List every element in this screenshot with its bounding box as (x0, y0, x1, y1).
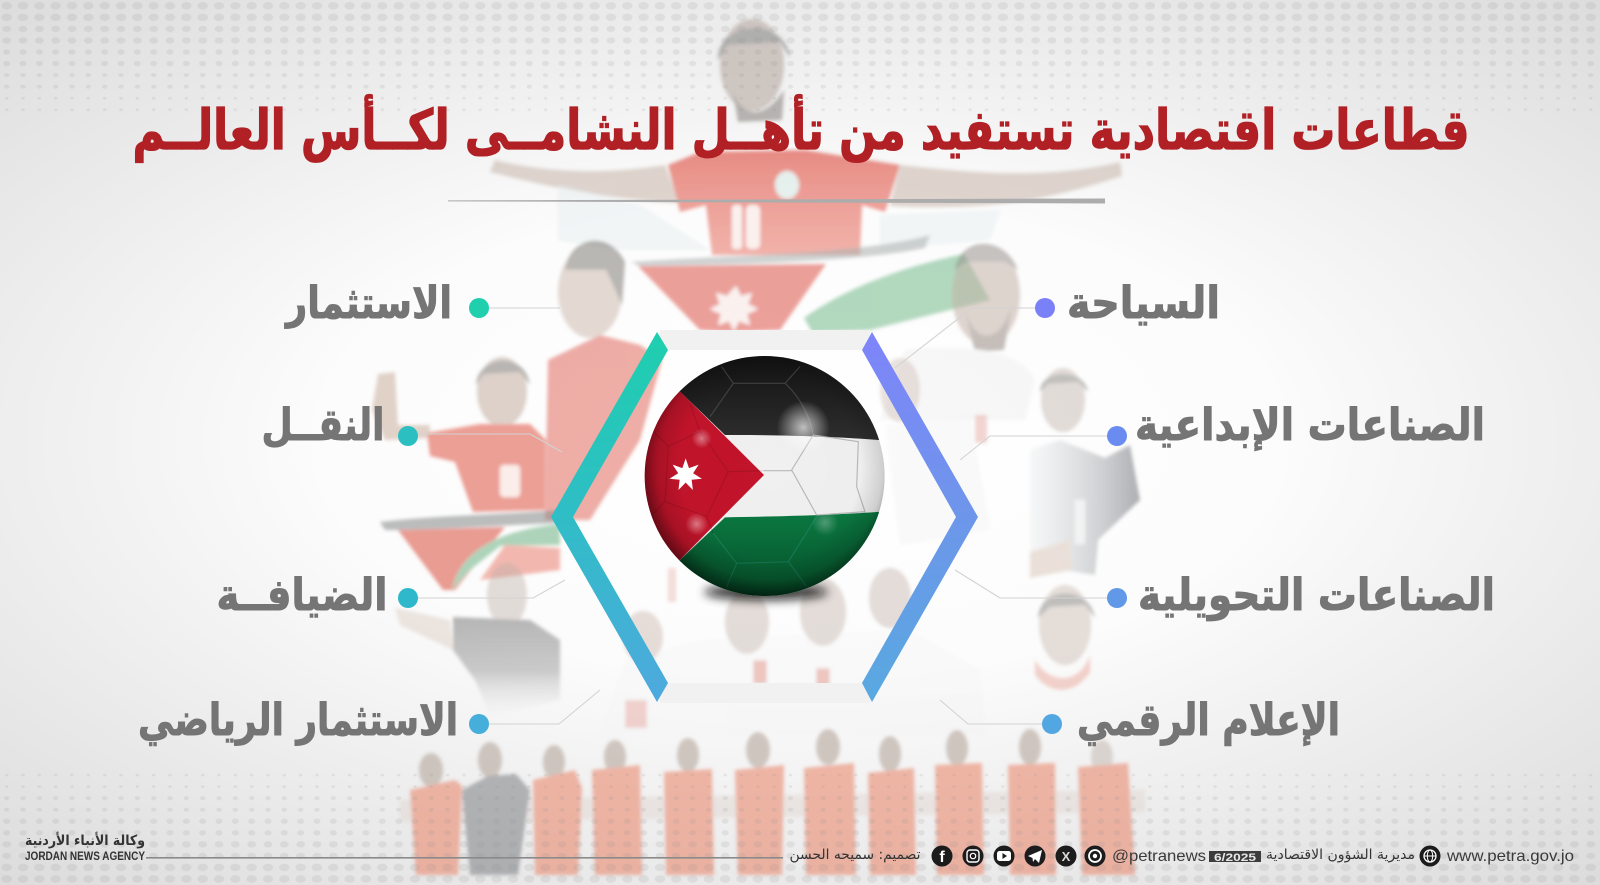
item: transport: النقــل (262, 400, 384, 451)
flag held on the left (380, 510, 560, 590)
goalkeeper (395, 563, 560, 715)
player 10 (1078, 740, 1135, 875)
flag black stripe (680, 356, 880, 440)
icon: x: X (1062, 849, 1071, 864)
dotted pattern top band (0, 0, 1600, 116)
date badge (1209, 851, 1261, 864)
dotted pattern bottom band (0, 769, 1600, 885)
social handle: @petranews (1112, 848, 1206, 865)
linked arms behind the line-up (400, 790, 1145, 822)
agency logo text: وكالة الأنباء الأردنية (25, 832, 145, 849)
flag held behind central player (631, 235, 990, 332)
item: digital media: الإعلام الرقمي (1077, 695, 1340, 746)
pale blue backdrop behind central player (558, 185, 1000, 250)
hexagon frame (551, 330, 978, 703)
player 6 (592, 740, 642, 875)
agency logo text: JORDAN NEWS AGENCY (25, 851, 145, 863)
icon: facebook (932, 846, 952, 866)
connector lines (418, 308, 1107, 724)
icon: globe (1420, 846, 1440, 866)
item: hospitality: الضيافــة (216, 570, 388, 621)
celebrating group at the bottom centre (600, 568, 985, 735)
designer credit: تصميم: سميحه الحسن (790, 847, 921, 863)
player 3 (664, 738, 714, 875)
title divider (448, 198, 1105, 204)
item: creative industries: الصناعات الإبداعية (1135, 400, 1485, 451)
player number 5 on the right (880, 358, 990, 545)
player 23 (410, 753, 462, 875)
icon: instagram (962, 846, 984, 866)
football with Jordan flag (644, 356, 885, 596)
player number 21 on the left (372, 357, 546, 512)
flag red triangle (644, 391, 764, 560)
flag white stripe (686, 410, 884, 596)
player head lower right (1035, 585, 1095, 690)
coach on the right (1030, 368, 1140, 578)
line-up of eleven players at the bottom (400, 729, 1145, 875)
icon: youtube (994, 846, 1014, 866)
date badge: 6/2025 (1214, 852, 1256, 864)
item: sports investment: الاستثمار الرياضي (138, 695, 458, 746)
player 11 (1008, 729, 1056, 875)
player 8 (735, 732, 784, 875)
social icons (932, 846, 1106, 866)
flag seven-pointed star (669, 458, 702, 490)
player on the right, shouting (880, 244, 1035, 420)
goalkeeper 1 (462, 742, 530, 875)
central player with spread arms (490, 19, 1122, 255)
item: manufacturing industries: الصناعات التحويلية (1138, 570, 1495, 621)
background photo collage of players (372, 19, 1145, 875)
player 17 (533, 745, 582, 875)
website: www.petra.gov.jo (1446, 848, 1574, 865)
department name: مديرية الشؤون الاقتصادية (1266, 847, 1415, 863)
item: investment: الاستثمار (284, 278, 452, 329)
player 13 (868, 736, 916, 875)
hexagon bottom bar (660, 683, 870, 703)
ball seams (650, 367, 865, 587)
icon: telegram (1024, 846, 1046, 866)
icon: whatsapp (1084, 846, 1106, 866)
agency logo text (25, 832, 145, 863)
footer rule (146, 857, 783, 859)
ball highlights (778, 402, 828, 450)
player 8b (935, 730, 984, 875)
icon: facebook: f (939, 849, 945, 866)
icon: x (1056, 846, 1076, 866)
player left of flag, shouting (545, 241, 662, 520)
ball shadow (704, 584, 828, 600)
ball spherical shading (645, 356, 885, 596)
flag green stripe (680, 512, 880, 596)
player 21 (804, 729, 856, 875)
hexagon left bracket (551, 332, 668, 702)
hexagon right bracket (862, 332, 978, 702)
item: tourism: السياحة (1067, 278, 1220, 329)
hexagon top bar (660, 330, 870, 350)
